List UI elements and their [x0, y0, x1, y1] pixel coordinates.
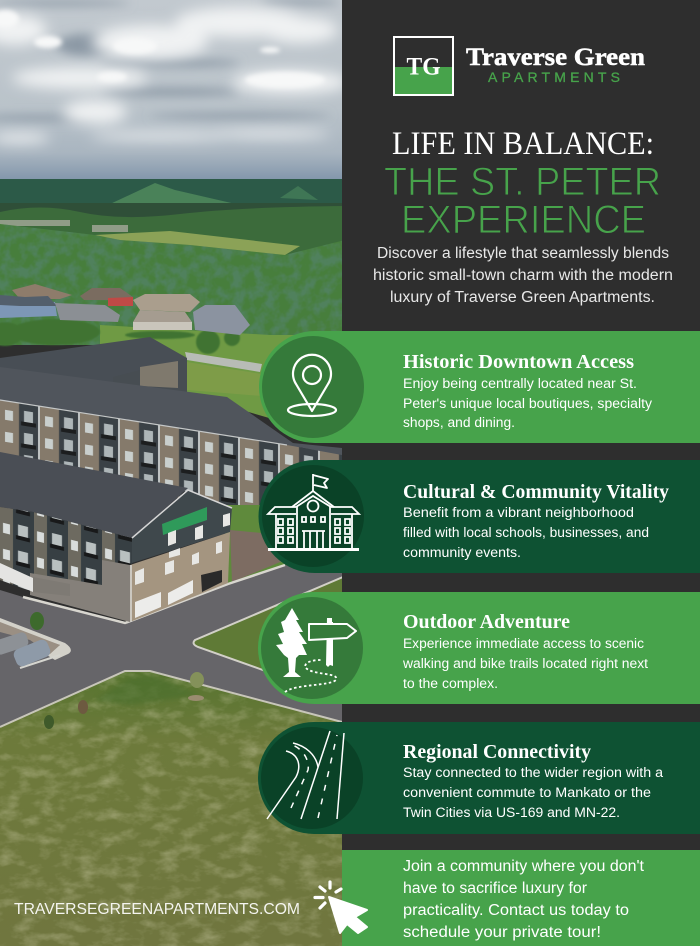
tree belt [0, 224, 345, 349]
intro paragraph: Discover a lifestyle that seamlessly blends [377, 245, 669, 262]
leasing banner [162, 507, 207, 535]
lawn behind buildings [0, 319, 345, 440]
ground behind front building [225, 505, 345, 600]
icon: pine tree, signpost and trail [276, 608, 356, 692]
body text: community events. [403, 545, 521, 560]
parking lot with cars [0, 612, 71, 668]
front apartment building [0, 452, 232, 622]
intro paragraph: luxury of Traverse Green Apartments. [390, 289, 655, 306]
panel: cultural and community vitality [258, 460, 700, 573]
body text: shops, and dining. [403, 415, 515, 430]
panel: call to action: have to sacrifice luxury for [403, 880, 587, 897]
heading: Historic Downtown Access [403, 351, 634, 373]
body text: convenient commute to Mankato or the [403, 785, 651, 800]
body text [402, 636, 648, 691]
logo [394, 37, 645, 95]
website url: TRAVERSEGREENAPARTMENTS.COM [14, 901, 300, 918]
body text: Stay connected to the wider region with a [403, 765, 664, 780]
right dark panel [342, 0, 700, 946]
panel: regional connectivity [258, 722, 700, 834]
logo: APARTMENTS [488, 69, 620, 85]
body text: Twin Cities via US-169 and MN-22. [403, 805, 620, 820]
sky with clouds [0, 0, 348, 180]
aerial photograph of apartment complex [0, 0, 350, 946]
heading: Cultural & Community Vitality [403, 481, 669, 503]
heading: Regional Connectivity [403, 741, 591, 763]
body text: Experience immediate access to scenic [403, 636, 644, 651]
heading: Outdoor Adventure [403, 611, 570, 633]
middle apartment building [0, 367, 342, 510]
title: THE ST. PETER [384, 160, 661, 204]
distant hills and fields [0, 179, 345, 262]
grass field [0, 665, 345, 946]
body text: walking and bike trails located right next [402, 656, 648, 671]
body text: filled with local schools, businesses, and [403, 525, 649, 540]
intro paragraph: historic small-town charm with the modern [373, 267, 673, 284]
icon: highway with on-ramp [267, 731, 344, 819]
body text: Enjoy being centrally located near St. [403, 376, 637, 391]
body text: to the complex. [403, 676, 498, 691]
body text: Benefit from a vibrant neighborhood [403, 505, 634, 520]
panel: call to action [342, 850, 700, 946]
panel: call to action: schedule your private tour! [403, 924, 601, 941]
neighborhood houses [0, 284, 250, 335]
logo: TG [406, 54, 440, 80]
logo: Traverse Green [466, 44, 645, 71]
back apartment building [0, 337, 187, 392]
panel: historic downtown access [259, 331, 700, 443]
panel: call to action: practicality. Contact us today to [403, 902, 629, 919]
body text [403, 505, 649, 560]
title [384, 126, 661, 242]
icon: school building [268, 474, 359, 550]
icon: click cursor [315, 882, 367, 933]
pavement and roads [0, 565, 350, 735]
panel: outdoor adventure [258, 592, 700, 704]
body text: Peter's unique local boutiques, specialty [403, 396, 652, 411]
body text [403, 376, 652, 430]
body text [403, 765, 664, 820]
title: EXPERIENCE [401, 198, 646, 242]
title: LIFE IN BALANCE: [392, 126, 654, 162]
icon: map pin [288, 355, 336, 416]
intro paragraph [373, 245, 673, 306]
panel: call to action: Join a community where you don't [403, 858, 645, 875]
